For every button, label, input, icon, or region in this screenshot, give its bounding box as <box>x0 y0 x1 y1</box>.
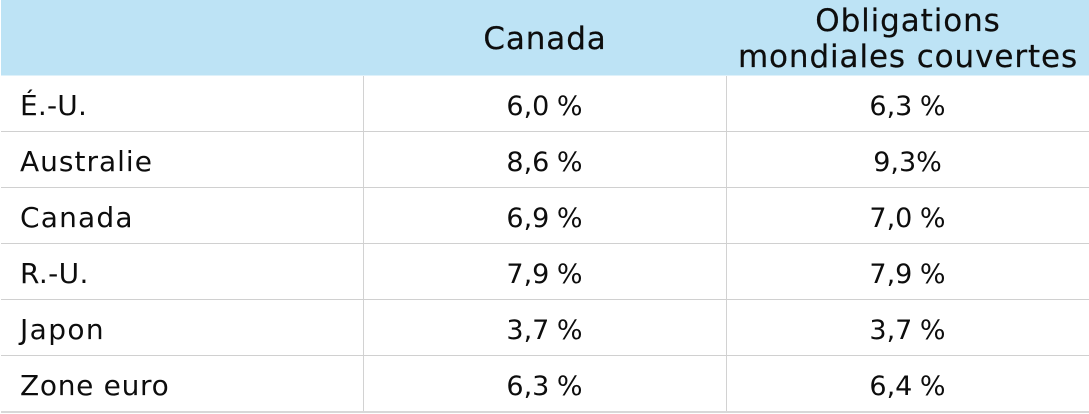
row: R.-U.: 7,9 % <box>506 259 583 290</box>
heading: Obligations mondiales couvertes: Obligations <box>815 3 1001 39</box>
row: Japon: 3,7 % <box>506 315 583 346</box>
row: Japon: 3,7 % <box>869 315 946 346</box>
row: É.-U.: 6,0 % <box>506 91 583 122</box>
heading: Canada: Canada <box>483 21 607 57</box>
row: Zone euro <box>20 369 946 402</box>
row: Canada: 7,0 % <box>869 203 946 234</box>
row: É.-U.: 6,3 % <box>869 91 946 122</box>
heading: Obligations mondiales couvertes: mondiales couvertes <box>738 39 1078 75</box>
row: Australie <box>20 145 942 178</box>
row: Japon <box>18 313 946 346</box>
row: Australie: Australie <box>20 145 153 178</box>
row: R.-U.: R.-U. <box>20 257 89 290</box>
row: Japon: Japon <box>20 313 105 346</box>
row: Canada <box>20 201 946 234</box>
row: Zone euro: 6,4 % <box>869 371 946 402</box>
row: R.-U.: 7,9 % <box>869 259 946 290</box>
row: Australie: 8,6 % <box>506 147 583 178</box>
row: É.-U.: É.-U. <box>20 89 87 122</box>
heading: Obligations mondiales couvertes <box>738 3 1078 75</box>
row: Canada: Canada <box>20 201 134 234</box>
row: Zone euro: Zone euro <box>20 369 170 402</box>
row: R.-U. <box>20 257 946 290</box>
row: Australie: 9,3% <box>873 147 942 178</box>
row: Canada: 6,9 % <box>506 203 583 234</box>
header band <box>1 0 1089 76</box>
row: Zone euro: 6,3 % <box>506 371 583 402</box>
row: É.-U. <box>20 89 946 122</box>
